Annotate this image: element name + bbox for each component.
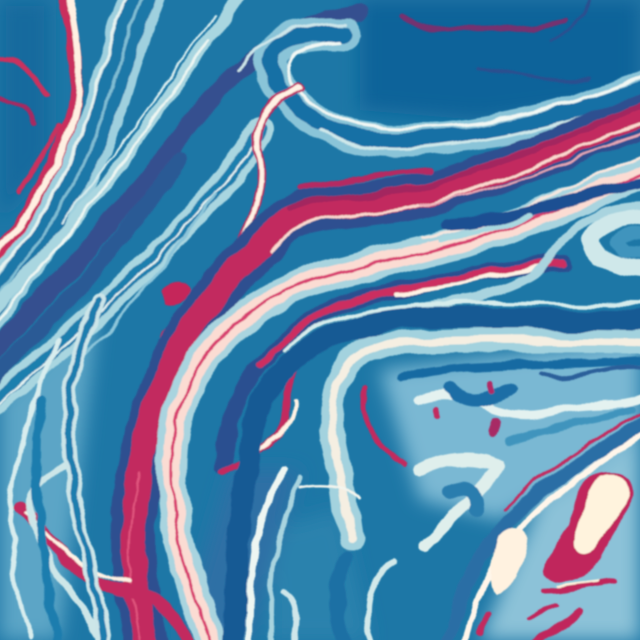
cream and red vertical ribbon [163, 85, 300, 335]
cream pink band [172, 155, 640, 640]
upper right dark band [440, 180, 640, 240]
main crimson band [129, 105, 640, 640]
bottom right white ribbons [445, 412, 640, 640]
purple diagonal band [0, 0, 360, 410]
top-left red swirl [0, 59, 60, 190]
cream inner curve [285, 341, 640, 640]
right swirl [380, 205, 640, 310]
bottom right red and cream blob [528, 472, 632, 640]
top-right dark lines [405, 0, 590, 81]
curved red sweep lower left [10, 300, 185, 640]
dark blue central band [232, 303, 640, 640]
left diagonal ribbons [0, 0, 150, 330]
central red and white streaks [222, 265, 565, 470]
mottled right patch [400, 360, 640, 545]
upper light ribbon [240, 25, 640, 149]
